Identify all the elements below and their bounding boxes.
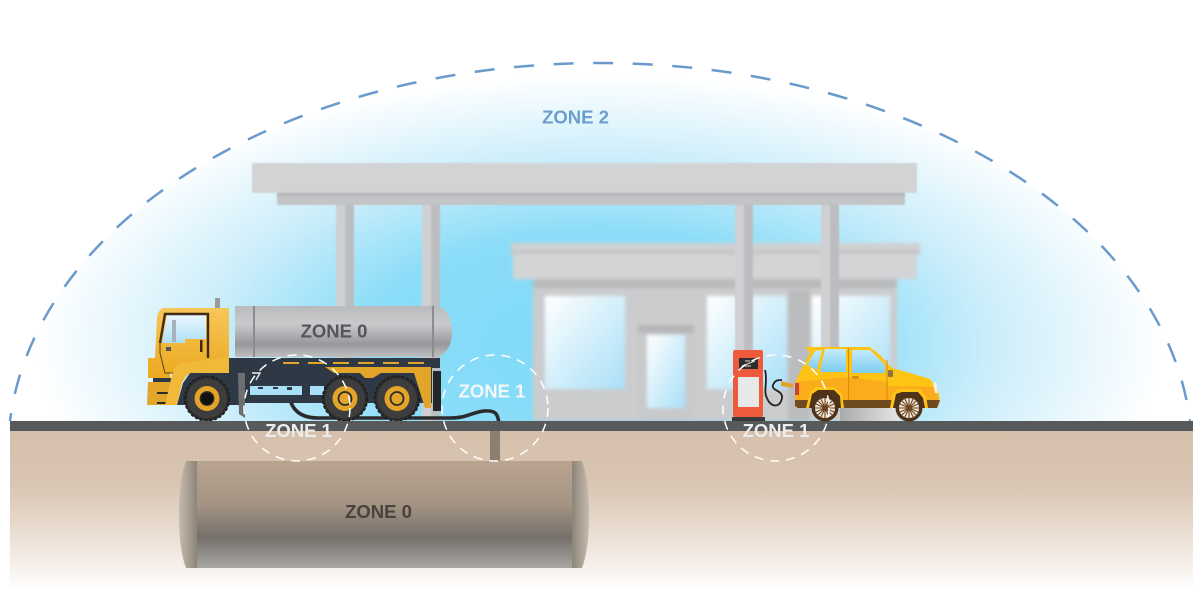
nozzle: [781, 381, 793, 388]
zone 1 circle at dispenser: [723, 355, 829, 461]
delivery hose: [289, 390, 499, 424]
fuel tank: [235, 306, 452, 357]
underground pipe: [490, 431, 500, 462]
exhaust stack: [215, 298, 220, 309]
truck wheels: [184, 376, 420, 421]
zone 2 hazard dome: [10, 63, 1190, 421]
car body: [795, 347, 940, 408]
yellow stripes: [283, 363, 431, 408]
road surface: [10, 421, 1193, 431]
blurred kiosk building: [510, 243, 920, 421]
chassis: [177, 358, 440, 405]
fuel dispenser: [732, 350, 793, 421]
zone 1 circle at truck: [244, 355, 350, 461]
blurred fuel canopy: [252, 163, 917, 421]
underground storage tank: [179, 461, 589, 568]
canopy roof: [252, 163, 917, 205]
zone 1 circle at fill pipe: [442, 355, 548, 461]
zone 1 circle at fill pipe: ZONE 1: [459, 380, 525, 402]
fender mudguard: [238, 373, 245, 418]
car windows: [807, 349, 885, 373]
rear bumper: [433, 371, 441, 411]
tanker truck: [147, 298, 452, 421]
zone 0 tanker label: ZONE 0: [301, 320, 367, 342]
zone 2 label: ZONE 2: [542, 106, 609, 128]
cab: [147, 308, 229, 405]
ground soil: [10, 431, 1193, 591]
car wheels: [806, 387, 928, 422]
yellow car: [795, 347, 940, 422]
zone 1 circle at truck: ZONE 1: [265, 420, 332, 441]
canopy pillars: [336, 204, 839, 421]
zone 1 circle at dispenser: ZONE 1: [743, 420, 809, 441]
zone 0 underground label: ZONE 0: [345, 501, 412, 522]
nozzle hose: [765, 370, 782, 406]
car shadow on forecourt: [840, 408, 900, 421]
